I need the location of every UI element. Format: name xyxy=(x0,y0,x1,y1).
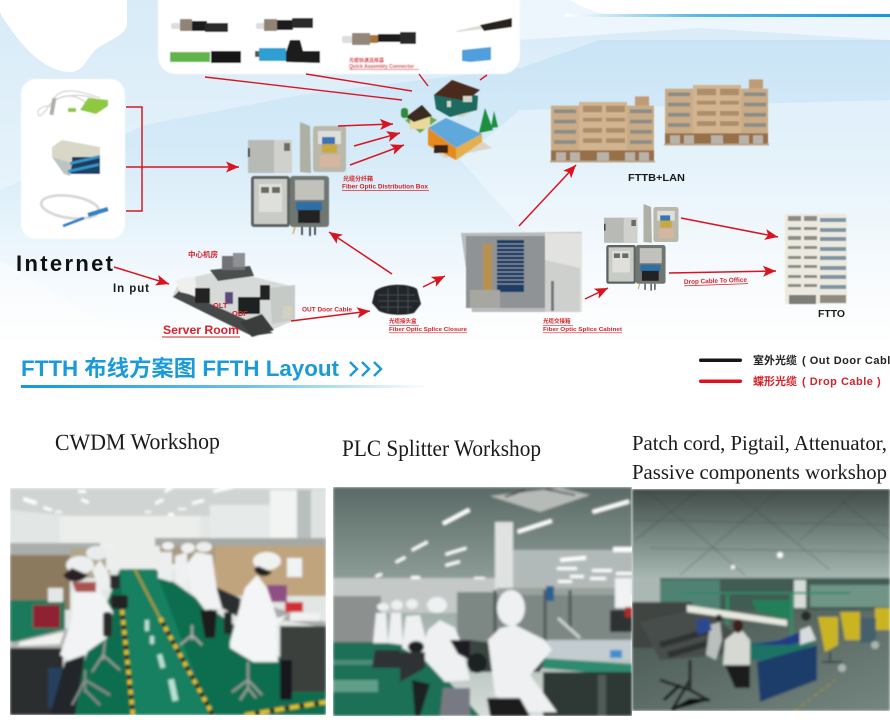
label: OLT: OLT xyxy=(213,301,228,310)
icon: fiber splitter xyxy=(38,91,108,116)
caption: Patch cord, Pigtail, Attenuator: Patch cord, Pigtail, Attenuator, xyxy=(632,431,887,455)
white cloud xyxy=(0,0,127,72)
photo: CWDM workshop xyxy=(10,485,326,715)
machines xyxy=(456,590,632,644)
small house xyxy=(401,105,437,133)
server room xyxy=(172,253,295,337)
label: splice closure: 光缆接头盒 xyxy=(389,317,417,325)
label: splice closure xyxy=(389,317,468,333)
right bench xyxy=(155,538,326,546)
legend: drop cable: 蝶形光缆 xyxy=(753,376,797,388)
arrow: cabinet to buildings xyxy=(519,165,576,226)
label: FTTO: FTTO xyxy=(818,309,845,320)
label: server room CN: 中心机房 xyxy=(188,249,218,259)
label: splice cabinet xyxy=(543,317,622,333)
legend xyxy=(699,353,890,388)
connector: bare fiber xyxy=(456,18,512,32)
splice cabinet xyxy=(461,232,582,312)
photo: passive components workshop xyxy=(632,489,890,711)
label: Internet: Internet xyxy=(16,251,114,276)
arrow: cabinet to box xyxy=(585,288,608,299)
icon: PLC box xyxy=(52,140,100,176)
label: quick assembly connector: Quick Assembly Connector xyxy=(349,64,414,70)
green house xyxy=(434,80,480,117)
arrow: to distribution box xyxy=(126,166,239,168)
connector: ST xyxy=(342,32,416,45)
label: ODF: ODF xyxy=(232,309,248,318)
panel: splitters xyxy=(21,79,125,239)
label: quick assembly connector xyxy=(349,57,419,70)
arrow: internet to server room xyxy=(114,267,169,284)
splice closure xyxy=(372,285,421,315)
icon: houses xyxy=(401,80,498,160)
connector: blue adapter xyxy=(462,47,491,62)
left bench xyxy=(10,543,100,555)
arrows: connector lines to houses xyxy=(205,74,487,100)
connector: FC black xyxy=(171,19,228,32)
arrows: box to houses xyxy=(338,124,404,165)
connector: SC blue xyxy=(255,40,320,63)
workbench xyxy=(680,592,850,594)
second distribution box xyxy=(604,204,678,291)
caption: Passive components workshop: Passive components workshop xyxy=(632,460,887,484)
panel: connectors xyxy=(158,0,520,74)
connector: FC black 2 xyxy=(256,18,313,31)
bracket lines xyxy=(126,107,142,211)
yellow suits xyxy=(818,608,890,652)
floor xyxy=(333,642,480,716)
buildings: FTTB xyxy=(550,79,769,162)
arrows: closure xyxy=(329,232,445,287)
label: Server Room: Server Room xyxy=(163,323,239,337)
factory xyxy=(427,118,492,160)
workers xyxy=(373,590,557,712)
FTTO building xyxy=(785,214,847,304)
floor xyxy=(63,569,326,715)
legend: out door cable: 室外光缆 xyxy=(753,355,797,367)
far wall xyxy=(659,576,890,612)
fiber optic distribution box xyxy=(248,122,346,236)
heading: FTTH Layout: FTTH 布线方案图 FFTH Layout xyxy=(21,356,340,381)
heading: FTTH Layout xyxy=(21,356,429,388)
label: splice cabinet: 光缆交接箱 xyxy=(543,317,571,325)
arrow: outdoor cable xyxy=(291,311,370,321)
caption: CWDM Workshop: CWDM Workshop xyxy=(55,429,220,455)
label: distribution box: 光缆分纤箱 xyxy=(343,175,373,183)
left workers xyxy=(104,551,112,572)
trees xyxy=(479,108,498,133)
label: distribution box: Fiber Optic Distribution Box xyxy=(342,184,429,190)
icon: fiber patch cord xyxy=(40,192,108,226)
arrows: to office xyxy=(669,218,778,273)
label: In put: In put xyxy=(113,283,149,295)
legend: drop cable xyxy=(699,374,881,388)
label: quick assembly connector: 光缆快速连接器 xyxy=(349,57,384,64)
label: distribution box xyxy=(342,175,429,191)
caption: PLC Splitter Workshop: PLC Splitter Workshop xyxy=(342,436,541,461)
connector: SC green xyxy=(170,51,241,63)
label: splice closure: Fiber Optic Splice Closure xyxy=(389,327,468,333)
racks xyxy=(632,602,692,648)
legend: drop cable: ( Drop Cable ) xyxy=(802,376,881,388)
label: OUT Door Cable: OUT Door Cable xyxy=(302,306,353,314)
label: drop cable to office: Drop Cable To Office xyxy=(684,277,747,286)
legend: out door cable xyxy=(699,353,890,367)
photo: PLC splitter workshop xyxy=(333,487,633,716)
label: splice cabinet: Fiber Optic Splice Cabinet xyxy=(543,327,622,333)
label: FTTB+LAN: FTTB+LAN xyxy=(628,173,685,184)
right workers xyxy=(158,552,172,582)
